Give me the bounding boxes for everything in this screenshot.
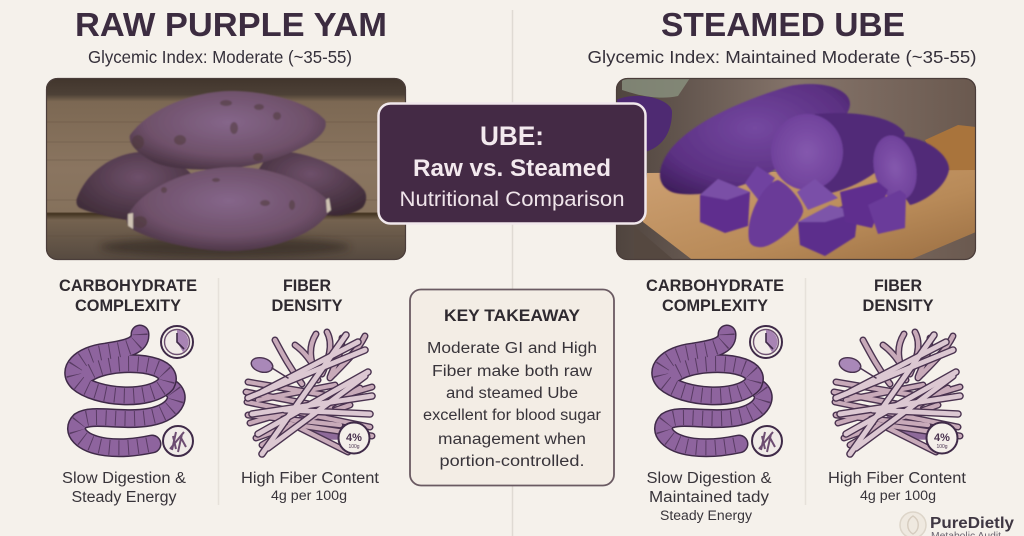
subtitle: raw glycemic index: Glycemic Index: Moderate (~35-55) — [88, 47, 352, 67]
title: raw purple yam: RAW PURPLE YAM — [75, 6, 387, 43]
heading: fiber density: FIBER — [283, 277, 331, 295]
text: takeaway body: portion-controlled. — [440, 453, 584, 470]
subtitle: steamed glycemic index: Glycemic Index: Maintained Moderate (~35-55) — [588, 47, 976, 67]
panel: steamed fiber density — [828, 277, 967, 503]
caption: slow digestion steamed: Steady Energy — [660, 508, 752, 523]
center title panel — [378, 104, 646, 224]
icon: fiber bundle — [246, 332, 372, 454]
badge: 4 percent: 4% — [346, 432, 362, 444]
icon: coiled complex carbohydrate chain steamed — [661, 334, 763, 448]
photo: raw purple yams on wood — [46, 78, 406, 260]
text: takeaway body: Fiber make both raw — [432, 363, 593, 380]
badge: 4 percent steamed: 100g — [936, 444, 948, 450]
logo: PureDietly: PureDietly — [930, 515, 1014, 532]
icon: clock steamed — [750, 326, 782, 358]
center title: nutritional comparison: Nutritional Comparison — [400, 188, 624, 211]
heading: carbohydrate complexity steamed: COMPLEXITY — [662, 297, 768, 315]
icon: coiled complex carbohydrate chain — [74, 334, 176, 448]
badge: 4 percent: 100g — [348, 444, 360, 450]
caption: slow digestion steamed: Maintained tady — [649, 489, 769, 506]
caption: 4g per 100g: 4g per 100g — [271, 488, 347, 503]
heading: fiber density steamed: DENSITY — [862, 297, 934, 315]
heading: fiber density steamed: FIBER — [874, 277, 922, 295]
panel: raw fiber density — [241, 277, 380, 503]
caption: high fiber content: High Fiber Content — [241, 470, 380, 487]
heading: carbohydrate complexity steamed: CARBOHYDRATE — [646, 277, 784, 295]
panel: key takeaway — [410, 290, 614, 486]
caption: slow digestion: Steady Energy — [72, 489, 177, 506]
heading: fiber density: DENSITY — [272, 297, 342, 315]
panel: raw carbohydrate complexity — [59, 277, 197, 506]
text: takeaway body: Moderate GI and High — [427, 340, 597, 357]
caption: 4g per 100g steamed: 4g per 100g — [860, 488, 936, 503]
heading: carbohydrate complexity: CARBOHYDRATE — [59, 277, 197, 295]
icon: clock — [161, 326, 193, 358]
logo: PureDietly — [900, 512, 1014, 536]
photo: steamed ube on cutting board — [616, 78, 976, 262]
icon: fiber percent steamed — [752, 426, 782, 456]
caption: slow digestion: Slow Digestion & — [62, 470, 187, 487]
text: takeaway body: management when — [438, 431, 586, 448]
center title: UBE: UBE: — [480, 121, 544, 151]
heading: key takeaway: KEY TAKEAWAY — [444, 307, 580, 325]
caption: high fiber content steamed: High Fiber Content — [828, 470, 967, 487]
text: takeaway body: excellent for blood sugar — [423, 407, 601, 424]
icon: fiber bundle steamed — [834, 332, 960, 454]
center title: raw vs steamed: Raw vs. Steamed — [413, 155, 611, 182]
text: takeaway body — [423, 340, 601, 470]
badge: 4 percent steamed — [926, 422, 958, 454]
badge: 4 percent steamed: 4% — [934, 432, 950, 444]
panel: steamed carbohydrate complexity — [646, 277, 784, 523]
title: steamed ube: STEAMED UBE — [661, 6, 905, 43]
caption: slow digestion steamed: Slow Digestion & — [646, 470, 772, 487]
icon: fiber percent — [163, 426, 193, 456]
text: takeaway body: and steamed Ube — [446, 385, 578, 402]
badge: 4 percent — [338, 422, 370, 454]
heading: carbohydrate complexity: COMPLEXITY — [75, 297, 181, 315]
